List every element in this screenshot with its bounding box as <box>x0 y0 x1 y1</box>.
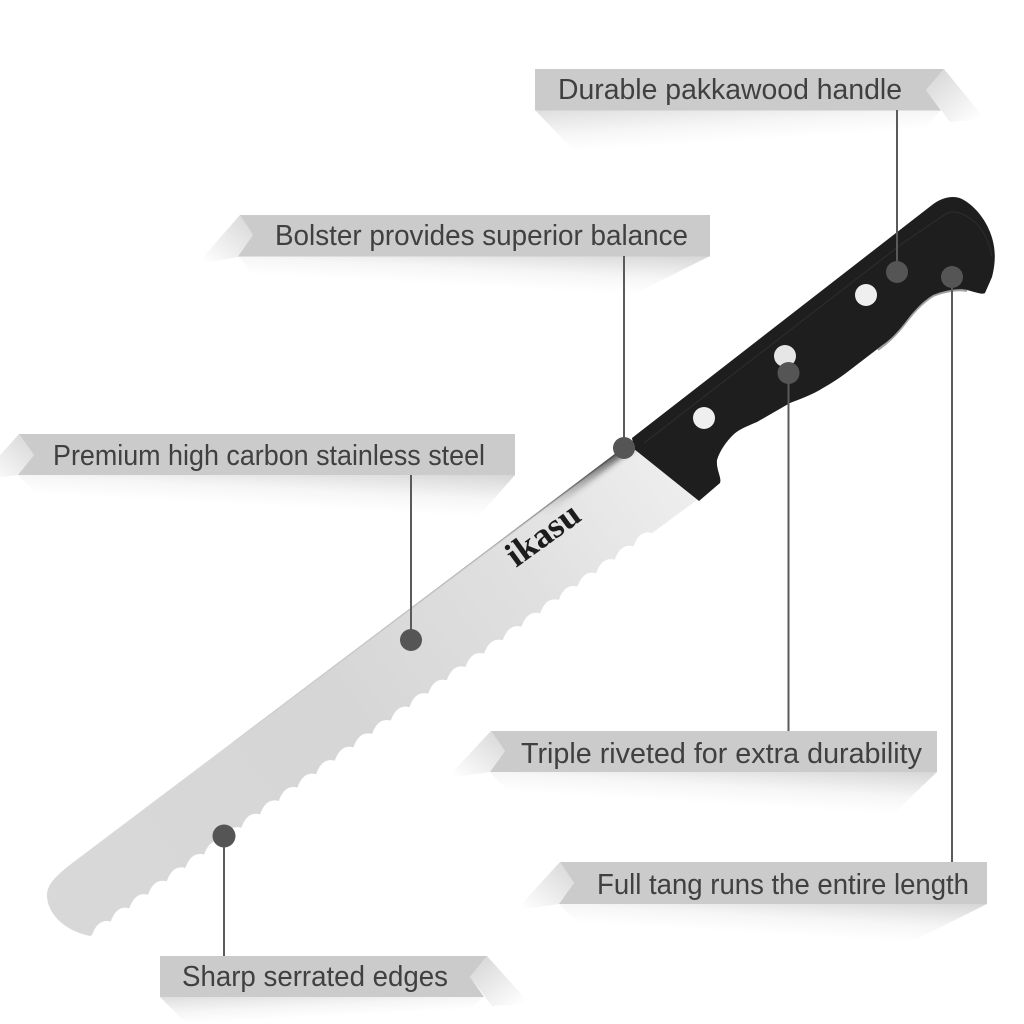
callout line and dot: tang <box>941 266 963 862</box>
ribbon: bolster <box>197 215 710 297</box>
callout line and dot: bolster <box>613 256 635 459</box>
handle <box>632 197 995 501</box>
blade <box>47 441 697 936</box>
knife <box>47 197 995 936</box>
rivet 2 <box>774 345 796 367</box>
blade spine shading <box>232 441 632 741</box>
ribbon: bolster: Bolster provides superior balance <box>275 220 688 252</box>
rivet 1 <box>693 407 715 429</box>
ribbon: durable pakkawood handle <box>535 69 985 152</box>
ribbon: premium steel <box>0 434 515 517</box>
ribbon: triple riveted <box>447 731 937 815</box>
ribbon: full tang <box>516 862 987 945</box>
handle underside edge <box>878 290 967 350</box>
ribbon: full tang: Full tang runs the entire length <box>597 869 969 901</box>
ribbon: premium steel: Premium high carbon stainless steel <box>53 440 485 472</box>
callout line and dot: handle <box>886 110 908 283</box>
handle ridge <box>644 212 992 443</box>
callout line and dot: steel <box>400 475 422 651</box>
ribbon: sharp serrated edges: Sharp serrated edges <box>182 961 448 993</box>
ribbon: durable pakkawood handle: Durable pakkawood handle <box>558 74 902 106</box>
callout line and dot: serrated edge <box>212 824 236 956</box>
logo: ikasu: ikasu <box>498 494 588 574</box>
ribbon: sharp serrated edges <box>160 956 530 1024</box>
callout line and dot: rivets <box>778 362 800 731</box>
rivet 3 <box>855 284 877 306</box>
ribbon: triple riveted: Triple riveted for extra durability <box>521 738 922 770</box>
